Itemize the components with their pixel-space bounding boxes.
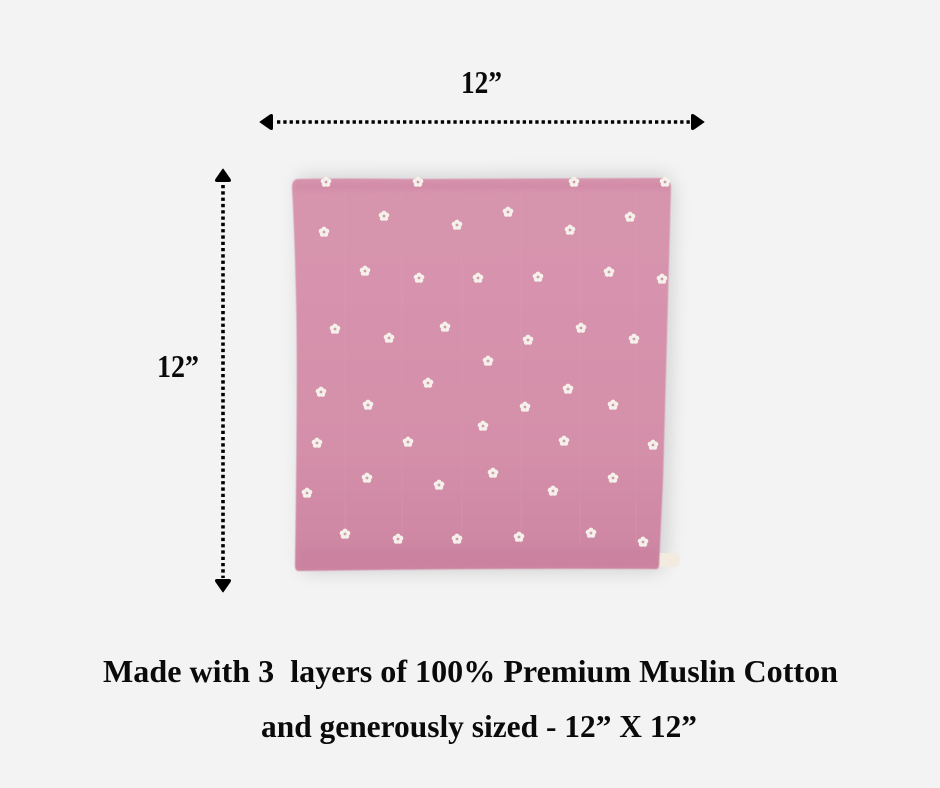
- caption line 1: Made with 3 layers of 100% Premium Muslin Cotton: [103, 653, 838, 689]
- caption line 2: and generously sized - 12” X 12”: [261, 708, 697, 744]
- cloth body: [292, 178, 671, 571]
- cotton tag: [654, 552, 680, 567]
- cloth weave lines: [345, 192, 636, 545]
- cloth bottom hem: [299, 548, 658, 568]
- height label: 12 inches: 12”: [157, 348, 199, 384]
- width label: 12 inches: 12”: [461, 64, 502, 100]
- flower print: [302, 177, 670, 547]
- muslin cloth with flower print: [292, 177, 671, 571]
- cloth shadow: [298, 174, 674, 572]
- width arrow: [260, 114, 704, 130]
- height arrow: [215, 169, 231, 592]
- cloth top hem: [294, 182, 668, 190]
